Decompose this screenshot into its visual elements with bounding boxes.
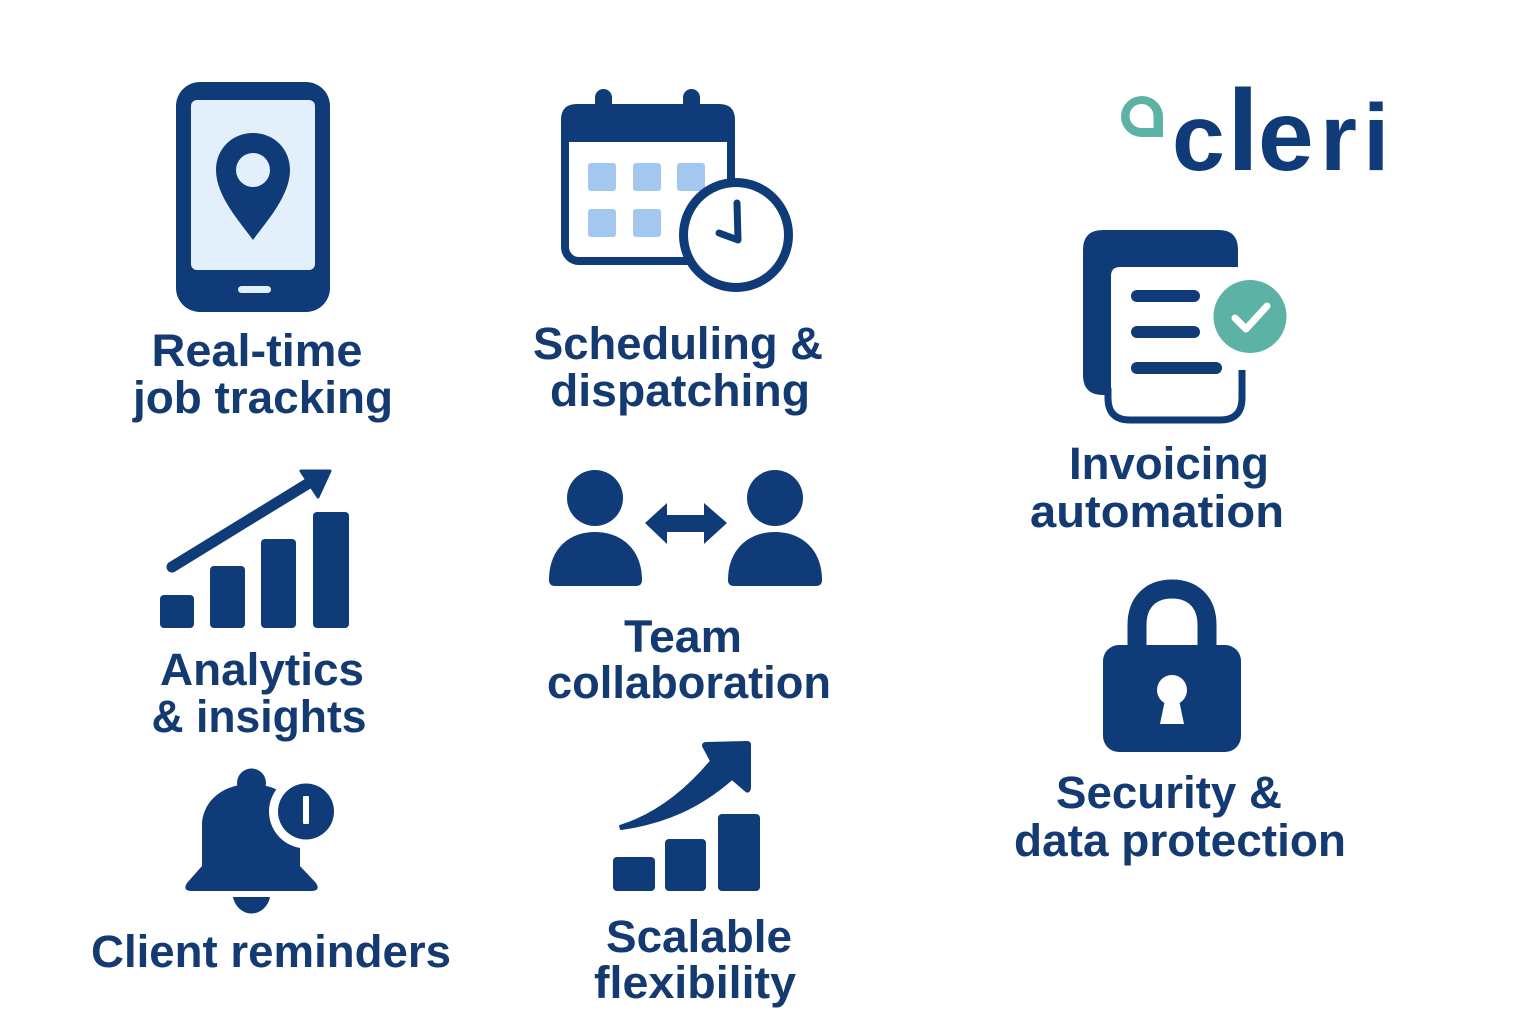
icon: bell with alert badge xyxy=(185,768,343,914)
icon: analytics bars with arrow xyxy=(160,471,349,628)
label: scalable flexibility: Scalable xyxy=(606,911,792,962)
logo: cleri xyxy=(1121,67,1389,195)
label: invoicing automation xyxy=(1030,438,1284,537)
label: real-time job tracking xyxy=(132,325,393,423)
label: team collaboration xyxy=(547,611,831,708)
icon: calendar with clock xyxy=(561,89,788,288)
label: real-time job tracking: job tracking xyxy=(132,372,393,423)
icon: team collaboration xyxy=(549,470,822,586)
label: analytics and insights: Analytics xyxy=(160,644,364,695)
label: scalable flexibility xyxy=(594,911,796,1008)
logo: cleri: i xyxy=(1363,85,1389,191)
label: analytics and insights: & insights xyxy=(152,691,366,742)
label: client reminders: Client reminders xyxy=(91,926,451,977)
label: team collaboration: Team xyxy=(624,611,742,662)
logo: cleri: l xyxy=(1227,67,1259,195)
label: team collaboration: collaboration xyxy=(547,657,831,708)
label: scheduling and dispatching: dispatching xyxy=(550,365,810,416)
label: scheduling and dispatching xyxy=(533,318,823,416)
label: security and data protection xyxy=(1014,767,1346,866)
label: analytics and insights xyxy=(152,644,366,742)
label: invoicing automation: automation xyxy=(1030,486,1284,537)
logo: cleri: e xyxy=(1258,80,1314,192)
icon: phone with location pin xyxy=(176,82,330,312)
label: scheduling and dispatching: Scheduling & xyxy=(533,318,823,369)
icon: padlock xyxy=(1103,589,1241,752)
logo: cleri: c xyxy=(1172,85,1225,191)
label: security and data protection: data protection xyxy=(1014,815,1346,866)
label: security and data protection: Security & xyxy=(1056,767,1282,818)
label: real-time job tracking: Real-time xyxy=(152,325,362,376)
logo: cleri: r xyxy=(1320,85,1357,191)
label: scalable flexibility: flexibility xyxy=(594,957,796,1008)
label: invoicing automation: Invoicing xyxy=(1069,438,1269,489)
icon: invoice document with check xyxy=(1083,230,1286,420)
icon: scalable growth bars with arrow xyxy=(613,742,760,891)
